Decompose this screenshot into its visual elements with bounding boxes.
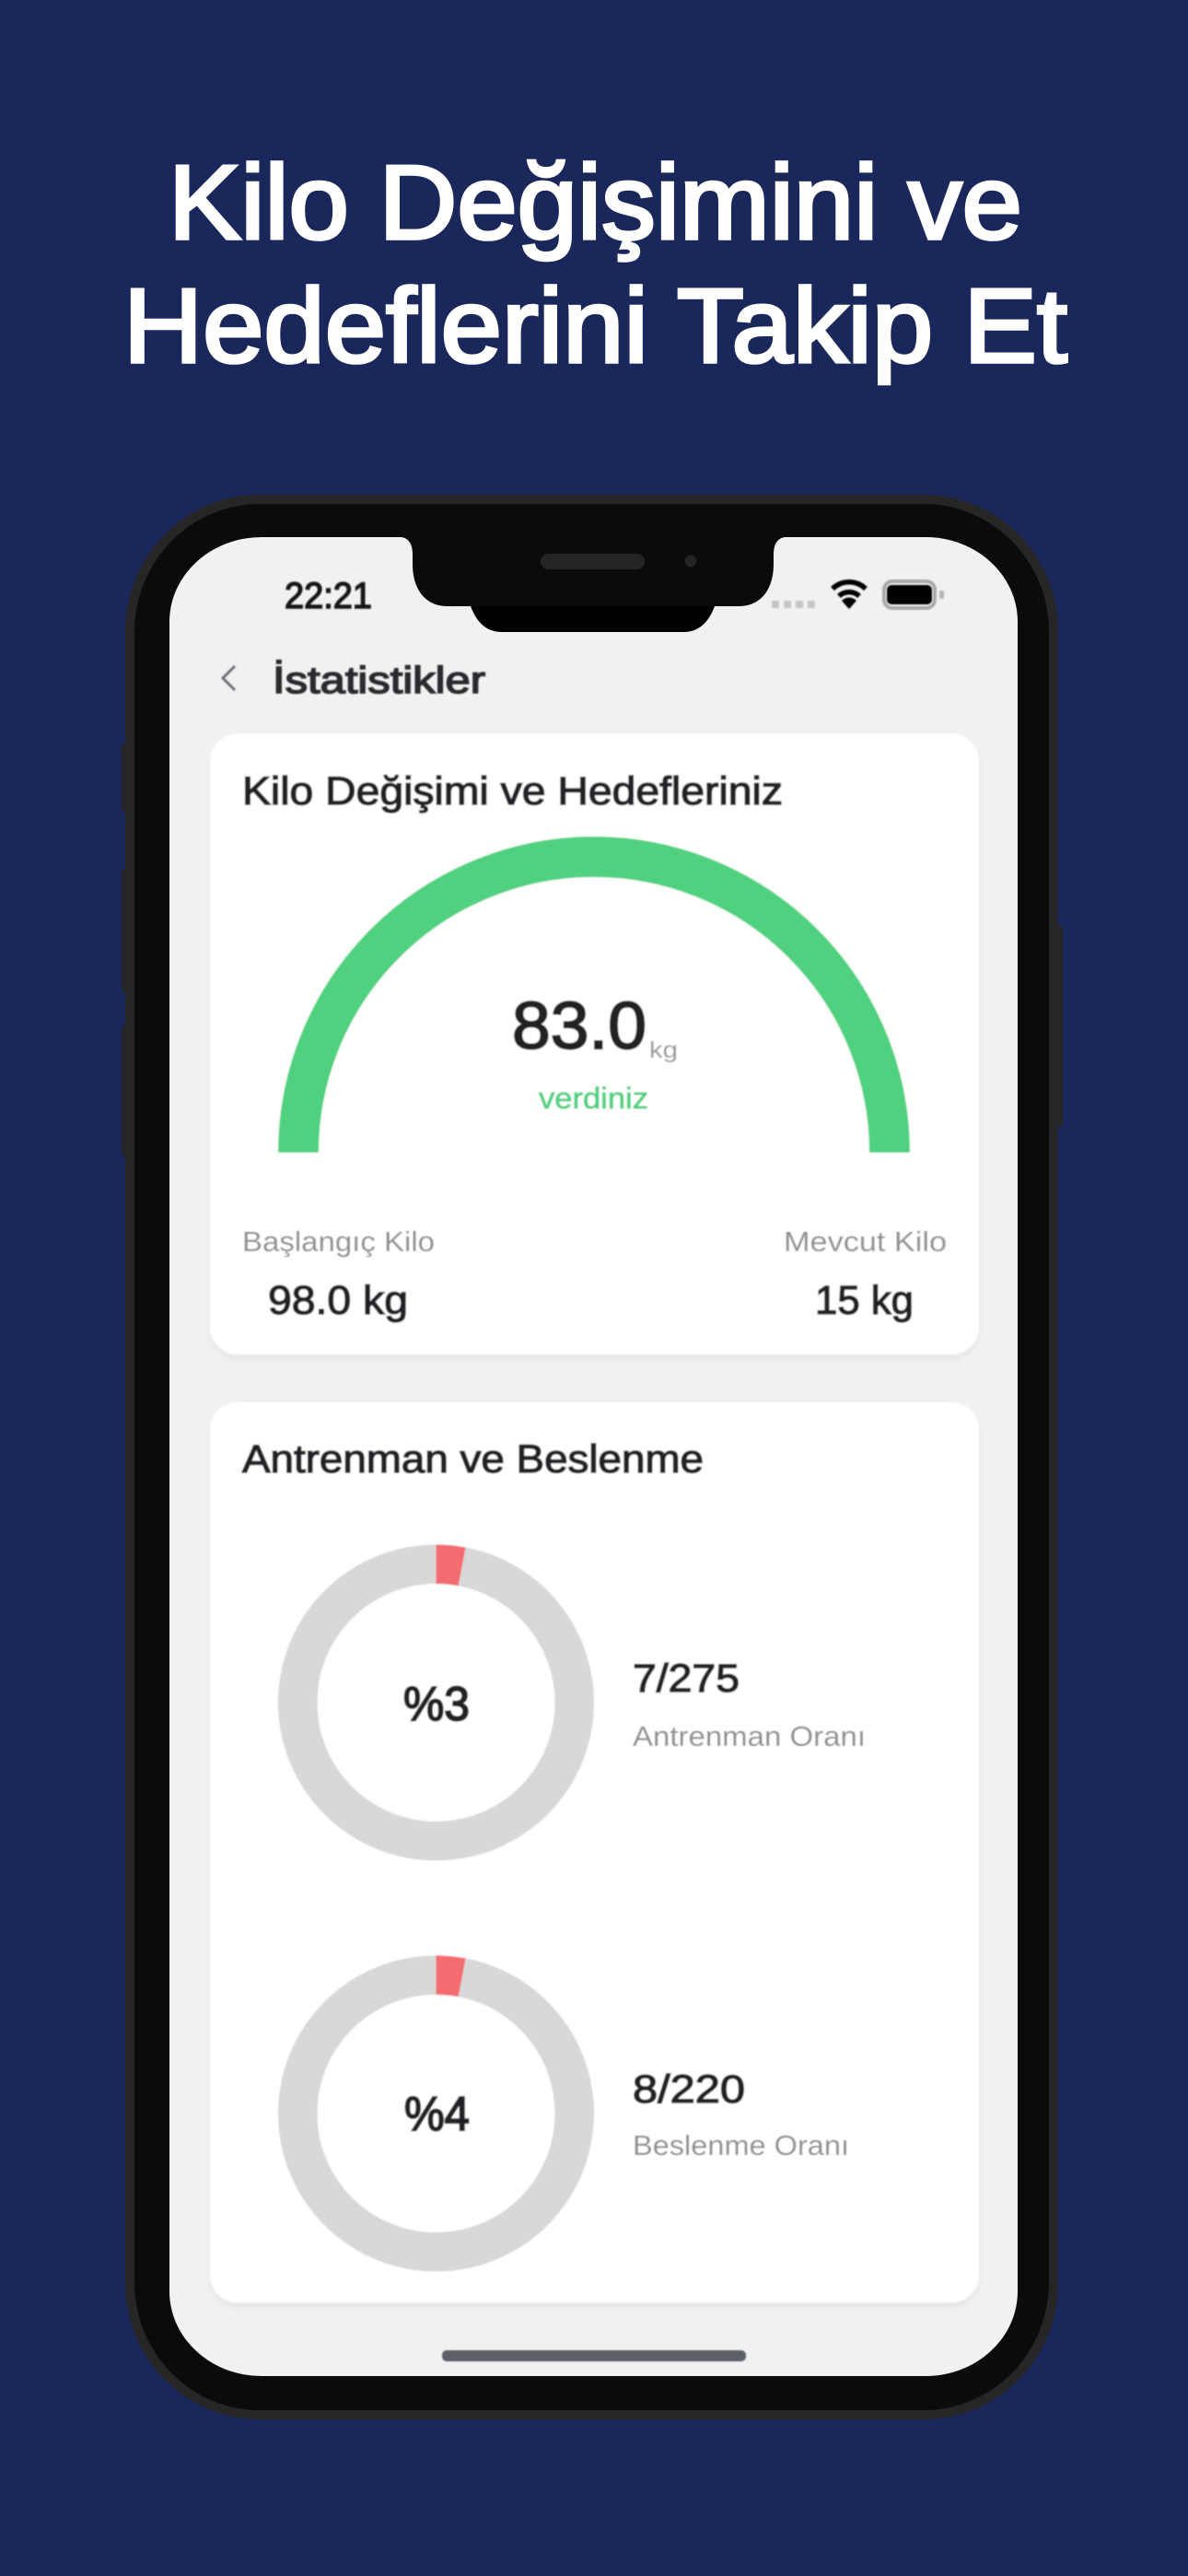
current weight: 15 kg [815,1278,914,1323]
phone side buttons [122,744,1063,1156]
nutrition stats: Beslenme Oranı [633,2129,849,2161]
nutrition stats: 8/220 [633,2067,745,2112]
screen heading: İstatistikler [273,659,485,701]
nutrition stats [633,2067,849,2161]
icon: wifi [833,582,866,609]
screen background [169,537,1018,2376]
phone frame [125,495,1058,2419]
app screen content [210,576,979,2361]
training stats [633,1657,866,1752]
home indicator [442,2350,746,2361]
phone mockup [122,495,1063,2419]
donut: training rate [297,1544,575,1841]
gauge unit: kg [649,1037,678,1063]
start weight: 98.0 kg [268,1278,408,1323]
panel heading: weight: Kilo Değişimi ve Hedefleriniz [242,769,783,814]
current weight [784,1225,947,1323]
gauge arc [298,857,890,1153]
training stats: Antrenman Oranı [633,1720,866,1752]
icon: back chevron [223,666,235,690]
donut: nutrition rate: %4 [404,2088,470,2141]
panel: training and nutrition [210,1402,979,2302]
notch [402,537,785,632]
gauge caption: verdiniz [539,1082,648,1115]
training stats: 7/275 [633,1657,740,1701]
current weight: Mevcut Kilo [784,1225,947,1258]
donut: nutrition rate [297,1955,575,2252]
title: Hedeflerini Takip Et [123,268,1067,385]
gauge value: 83.0 [512,989,646,1063]
title: Kilo Değişimini ve [169,145,1022,262]
title [123,145,1067,385]
status signal dots [772,601,815,608]
start weight: Başlangıç Kilo [242,1225,435,1258]
start weight [242,1225,435,1323]
panel: weight change [210,733,979,1354]
donut: training rate: %3 [403,1678,470,1731]
panel heading: training: Antrenman ve Beslenme [242,1437,704,1481]
status time: 22:21 [285,576,372,616]
icon: battery [884,581,944,608]
